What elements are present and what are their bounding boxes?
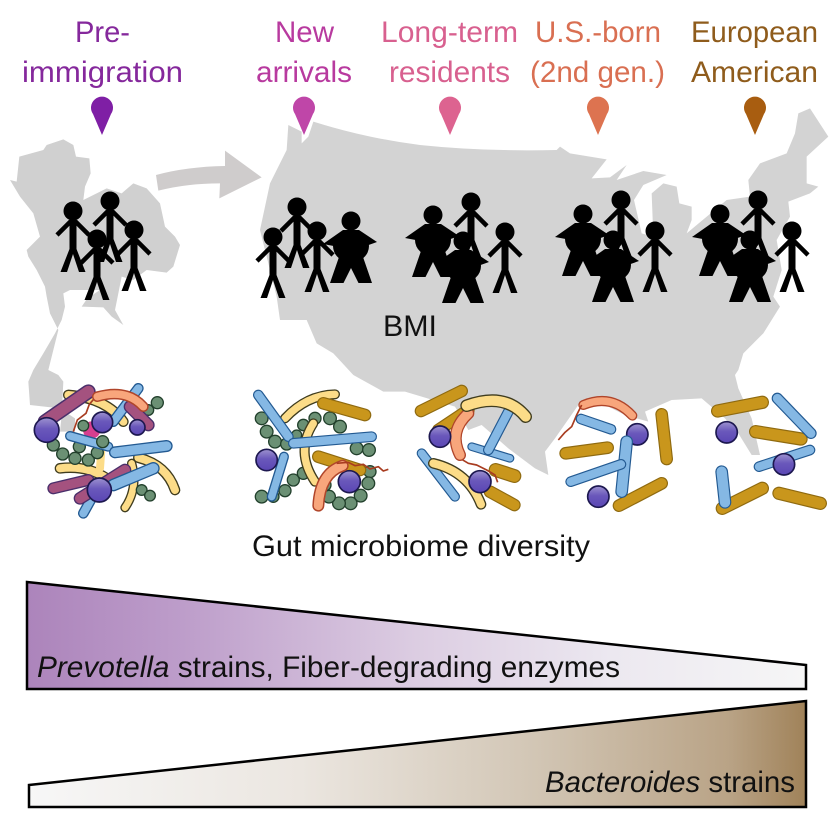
label: Pre-immigration: Pre- bbox=[75, 16, 130, 49]
pin: New arrivals bbox=[293, 97, 315, 135]
microbiome: pre-immigration bbox=[34, 388, 175, 513]
text: BMI: BMI bbox=[383, 310, 437, 343]
arrow: migration bbox=[156, 151, 262, 198]
microbiome: European American bbox=[716, 398, 820, 508]
label: U.S.-born 2nd generation: U.S.-born bbox=[535, 16, 661, 49]
wedge: Prevotella decreasing bbox=[27, 582, 806, 689]
label: Long-term residents: Long-term bbox=[381, 16, 518, 49]
text: Gut microbiome diversity: Gut microbiome diversity bbox=[252, 530, 590, 563]
text: Prevotella strains, Fiber-degrading enzymes: Prevotella strains, Fiber-degrading enzymes bbox=[37, 651, 620, 684]
text: Bacteroides strains: Bacteroides strains bbox=[545, 766, 795, 799]
wedge: Bacteroides increasing bbox=[29, 701, 806, 807]
people: European American group bbox=[692, 190, 808, 302]
label: European American bbox=[691, 16, 818, 89]
label: Long-term residents bbox=[381, 16, 518, 89]
label: European American: American bbox=[691, 56, 818, 89]
label: New arrivals: New bbox=[275, 16, 334, 49]
label: Pre-immigration bbox=[22, 16, 183, 89]
people: U.S.-born group bbox=[555, 190, 671, 302]
label: Long-term residents: residents bbox=[389, 56, 510, 89]
microbiome: long-term residents bbox=[421, 391, 526, 505]
label: New arrivals: arrivals bbox=[256, 56, 352, 89]
pin: Pre-immigration bbox=[91, 97, 113, 135]
people: new arrivals group bbox=[257, 198, 377, 298]
pin: European American bbox=[744, 97, 766, 135]
pin: U.S.-born bbox=[587, 97, 609, 135]
people: pre-immigration group bbox=[57, 192, 150, 300]
people: long-term residents group bbox=[405, 192, 521, 303]
map: United States bbox=[260, 108, 828, 475]
microbiome: U.S.-born bbox=[558, 401, 667, 507]
label: New arrivals bbox=[256, 16, 352, 89]
title labels: migration groups bbox=[22, 16, 818, 89]
label: European American: European bbox=[691, 16, 818, 49]
pin: Long-term residents bbox=[439, 97, 461, 135]
label: U.S.-born 2nd generation bbox=[530, 16, 665, 89]
microbiome: new arrivals bbox=[255, 394, 388, 510]
map: Thailand bbox=[10, 139, 180, 432]
label: Pre-immigration: immigration bbox=[22, 56, 183, 89]
label: U.S.-born 2nd generation: (2nd gen.) bbox=[530, 56, 665, 89]
